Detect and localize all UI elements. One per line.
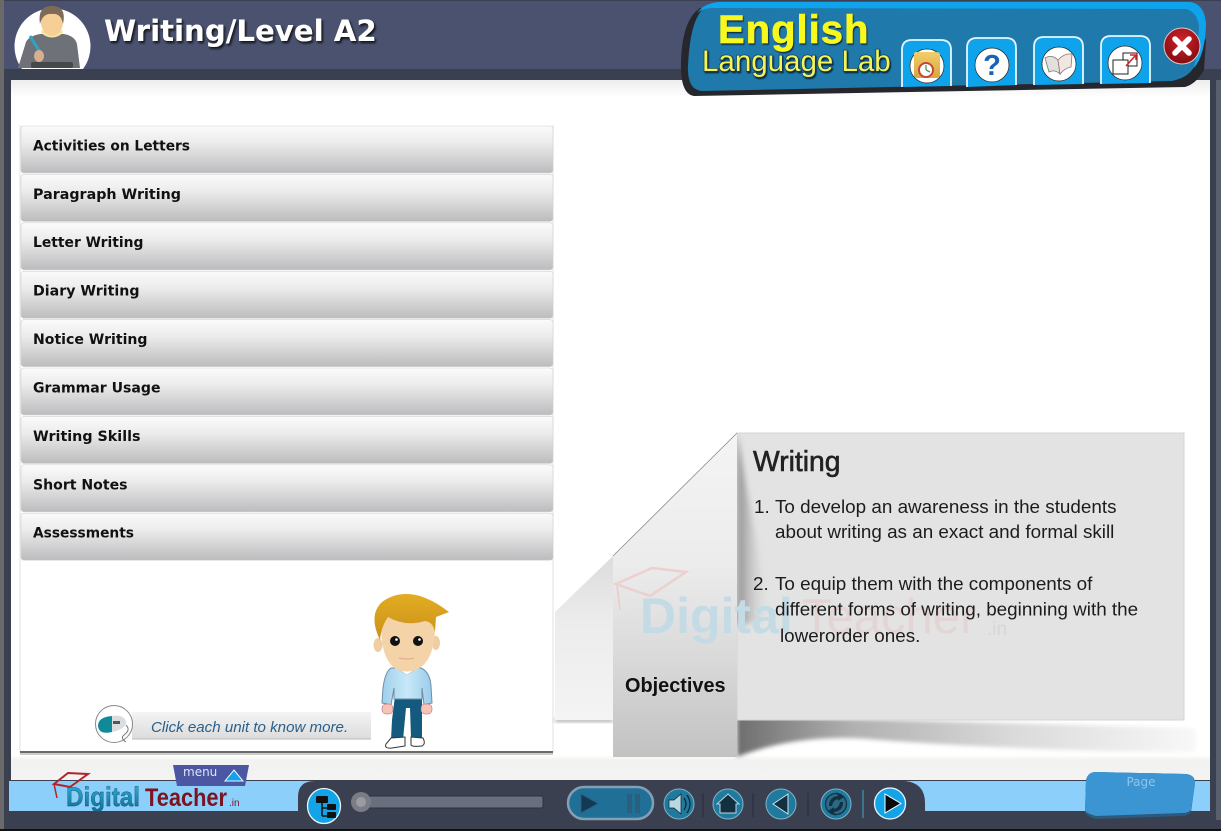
panel: objectives folded card xyxy=(555,433,1196,757)
illustration: cartoon boy xyxy=(374,594,449,748)
menu item: Letter Writing: Letter Writing xyxy=(33,235,144,251)
menu item: Diary Writing: Diary Writing xyxy=(33,284,140,300)
main card xyxy=(737,433,1184,720)
panel: English Language Lab toolbar xyxy=(681,2,1206,96)
icon: close xyxy=(1164,28,1200,64)
menu item: Paragraph Writing: Paragraph Writing xyxy=(33,187,181,203)
objective list xyxy=(753,496,1138,646)
logo: Digital Teacher xyxy=(54,773,240,812)
tab: help: ? xyxy=(983,50,1001,82)
heading: Writing: Writing xyxy=(753,445,841,477)
objective list: To develop an awareness in the students xyxy=(775,496,1117,517)
label: Objectives: Objectives xyxy=(625,675,726,697)
button: back xyxy=(766,789,796,819)
objective list: about writing as an exact and formal skill xyxy=(775,521,1114,542)
watermark logo: Digital xyxy=(640,588,793,644)
button: next xyxy=(874,788,906,819)
tab: book xyxy=(1034,37,1083,85)
menu item: Paragraph Writing xyxy=(21,174,553,221)
logo: Digital Teacher: Teacher xyxy=(145,784,227,812)
folded tab xyxy=(613,433,737,757)
objective list: different forms of writing, beginning with the xyxy=(775,598,1138,620)
watermark logo: .in xyxy=(987,619,1007,640)
button: sound xyxy=(664,789,694,819)
menu item: Writing Skills: Writing Skills xyxy=(33,429,140,445)
menu item: Writing Skills xyxy=(21,416,553,463)
slider xyxy=(351,792,543,812)
button: home xyxy=(713,789,743,819)
icon: mouse xyxy=(96,706,132,742)
watermark logo xyxy=(616,568,1007,644)
objective list: 1. xyxy=(754,496,770,517)
fold shadow xyxy=(737,433,770,625)
menu item: Letter Writing xyxy=(21,223,553,270)
menu item: Short Notes: Short Notes xyxy=(33,477,128,493)
logo: Digital Teacher: .in xyxy=(229,798,240,809)
menu item: Assessments xyxy=(21,513,553,560)
menu item: Activities on Letters: Activities on Letters xyxy=(33,138,190,154)
heading: English: English xyxy=(718,8,869,52)
page button: Page xyxy=(1126,775,1156,789)
callout: click hint xyxy=(96,706,371,742)
ground shadow xyxy=(737,716,1196,757)
panel: unit menu xyxy=(20,125,553,755)
menu tab: menu xyxy=(183,765,217,779)
page button xyxy=(1085,772,1195,819)
menu item: Notice Writing xyxy=(21,320,553,367)
objective list: lowerorder ones. xyxy=(780,625,920,646)
menu item: Grammar Usage xyxy=(21,368,553,415)
watermark logo: Teacher xyxy=(802,590,976,644)
footer band xyxy=(9,781,1210,811)
tab: folder clock xyxy=(902,40,951,87)
panel: playback controls xyxy=(298,781,925,824)
objective list: To equip them with the components of xyxy=(775,573,1093,594)
menu item: Assessments: Assessments xyxy=(33,526,134,542)
play pause pill xyxy=(568,787,653,819)
objective list: 2. xyxy=(753,573,769,594)
menu item: Short Notes xyxy=(21,465,553,512)
tab: help xyxy=(967,38,1016,87)
menu tab xyxy=(173,765,249,786)
menu item: Notice Writing: Notice Writing xyxy=(33,332,148,348)
title: Writing/Level A2 xyxy=(104,14,377,48)
menu item: Grammar Usage: Grammar Usage xyxy=(33,380,160,396)
button: contents tree xyxy=(308,788,340,824)
back flap xyxy=(555,556,613,720)
callout: click hint: Click each unit to know more. xyxy=(151,719,348,736)
menu item: Diary Writing xyxy=(21,271,553,318)
button: replay xyxy=(821,789,851,819)
logo: Digital Teacher: Digital xyxy=(66,782,140,812)
heading: Language Lab: Language Lab xyxy=(702,45,891,78)
tab: windows xyxy=(1101,36,1150,84)
icon: student avatar xyxy=(15,6,91,69)
menu item: Activities on Letters xyxy=(21,126,553,173)
